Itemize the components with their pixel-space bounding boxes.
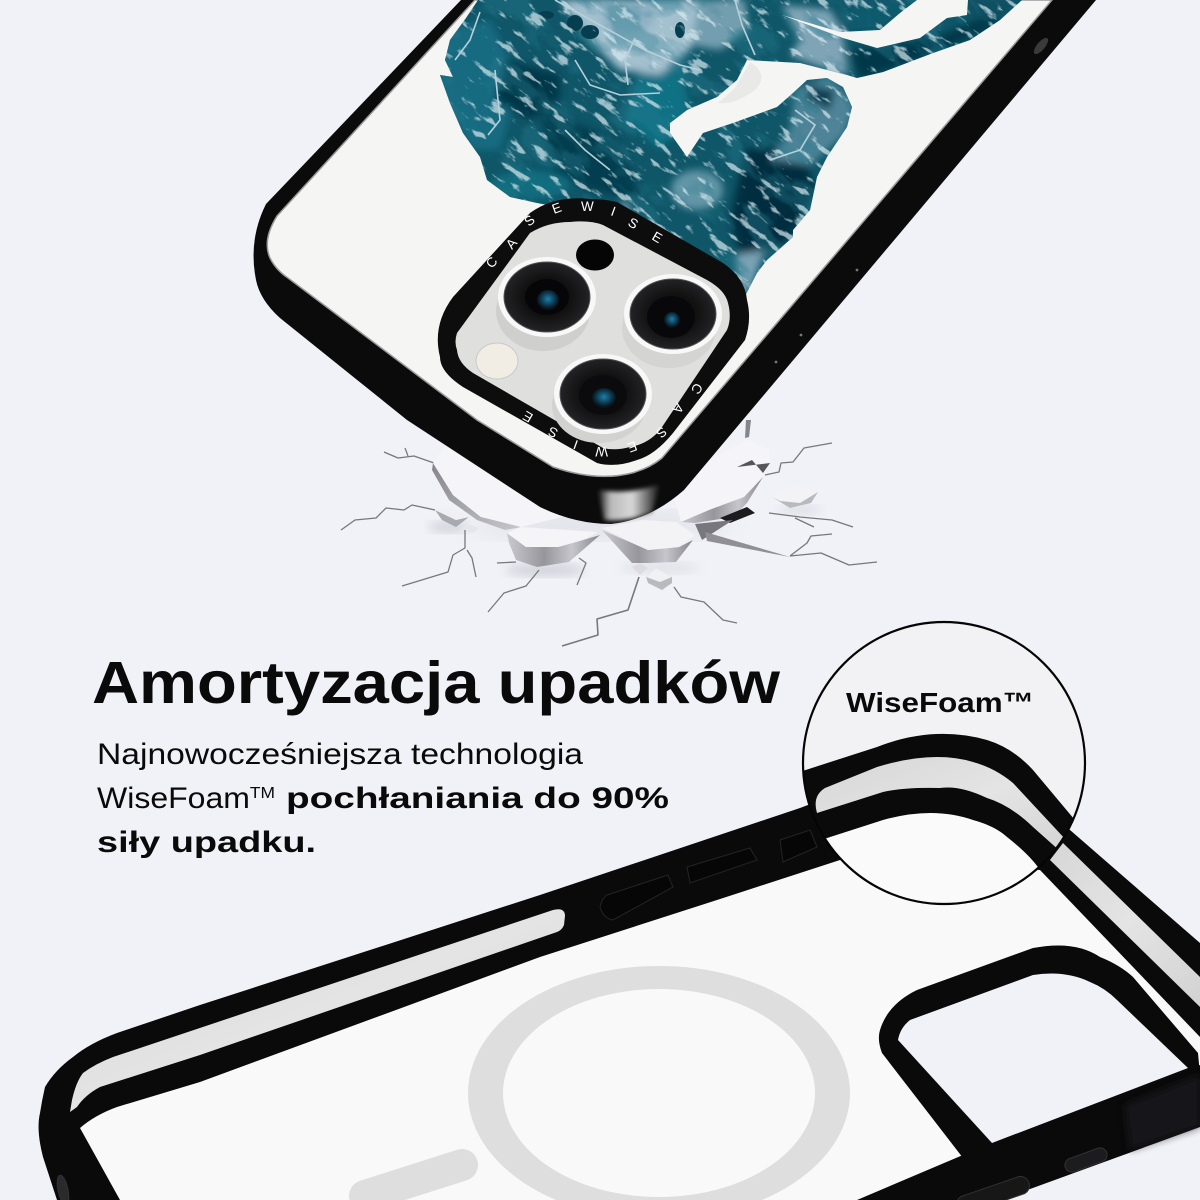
- camera black ring: [438, 198, 749, 465]
- heading: Amortyzacja upadków: [92, 650, 780, 716]
- line 3 bold: siły upadku.: [97, 826, 316, 859]
- central left rock: [507, 533, 600, 567]
- flash: [476, 343, 518, 379]
- small center rocks: [632, 563, 648, 575]
- magnifier callout circle: [802, 620, 1086, 906]
- side buttons: [775, 36, 1050, 363]
- phone back white: [267, 0, 1052, 476]
- dark crevice: [720, 507, 755, 523]
- left plate: [432, 463, 521, 530]
- teal ocean artwork: [440, 0, 1022, 294]
- magnified outer band: [804, 734, 1073, 867]
- case black silhouette: [39, 770, 1200, 1200]
- small left rock: [435, 510, 469, 527]
- case black frame: [254, 0, 1096, 524]
- line 1: Najnowocześniejsza technologia: [97, 738, 584, 771]
- white curved cutout band: [782, 0, 968, 48]
- rock chunks: [432, 420, 818, 590]
- lens 1: [496, 257, 596, 351]
- camera cutout frame: [879, 945, 1200, 1158]
- foam streaks: [455, 0, 815, 170]
- turbulence foam: [446, 0, 1018, 288]
- magnet ring ghost: [718, 62, 761, 103]
- side glass strip left: [70, 909, 565, 1112]
- wedge: [705, 532, 790, 557]
- central right rock: [602, 530, 693, 563]
- magnified glass strip: [816, 757, 1063, 848]
- circle outline: [803, 622, 1085, 904]
- side buttons: [600, 830, 817, 920]
- artwork base: [440, 0, 1022, 300]
- lens 2: [622, 274, 722, 368]
- right plate: [670, 440, 770, 522]
- spike: [745, 420, 751, 438]
- soft colour patches: [440, 0, 1022, 300]
- artwork texture: [440, 0, 1021, 294]
- circle fill: [803, 622, 1085, 904]
- dark triangle: [737, 460, 770, 473]
- bottom phone case: [39, 770, 1200, 1200]
- side glass strip right: [1050, 843, 1200, 1007]
- camera bump: [438, 198, 749, 465]
- camera silver plate: [456, 221, 730, 449]
- casewise ring text bottom: CASEWISE: [520, 380, 706, 459]
- line 2 regular: WiseFoam: [97, 782, 238, 815]
- turbulence dark: [445, 0, 978, 292]
- small right rock: [772, 485, 818, 508]
- microphone hole: [576, 240, 614, 270]
- magnified interior: [826, 813, 1038, 903]
- bottom ports: [55, 1146, 1109, 1200]
- case gloss highlight: [598, 484, 660, 520]
- magnified case detail: [804, 734, 1073, 867]
- alignment pill: [365, 1165, 462, 1196]
- description text: [97, 738, 669, 859]
- dark holes: [538, 11, 685, 39]
- crack lines: [341, 443, 877, 646]
- impact shadows: [428, 505, 822, 577]
- magsafe ring: [468, 966, 850, 1200]
- case lighter area: [1125, 1075, 1200, 1150]
- top phone in black case: [254, 0, 1096, 524]
- callout label: WiseFoam™: [846, 687, 1034, 718]
- camera cutout hole: [898, 974, 1188, 1143]
- cracked ground impact: [341, 420, 877, 646]
- line 2 bold: pochłaniania do 90%: [286, 782, 669, 815]
- clear interior: [80, 860, 1200, 1200]
- line 2 regular: TM: [250, 785, 275, 802]
- lens 3: [552, 354, 652, 443]
- casewise ring text top: CASEWISE: [483, 199, 665, 271]
